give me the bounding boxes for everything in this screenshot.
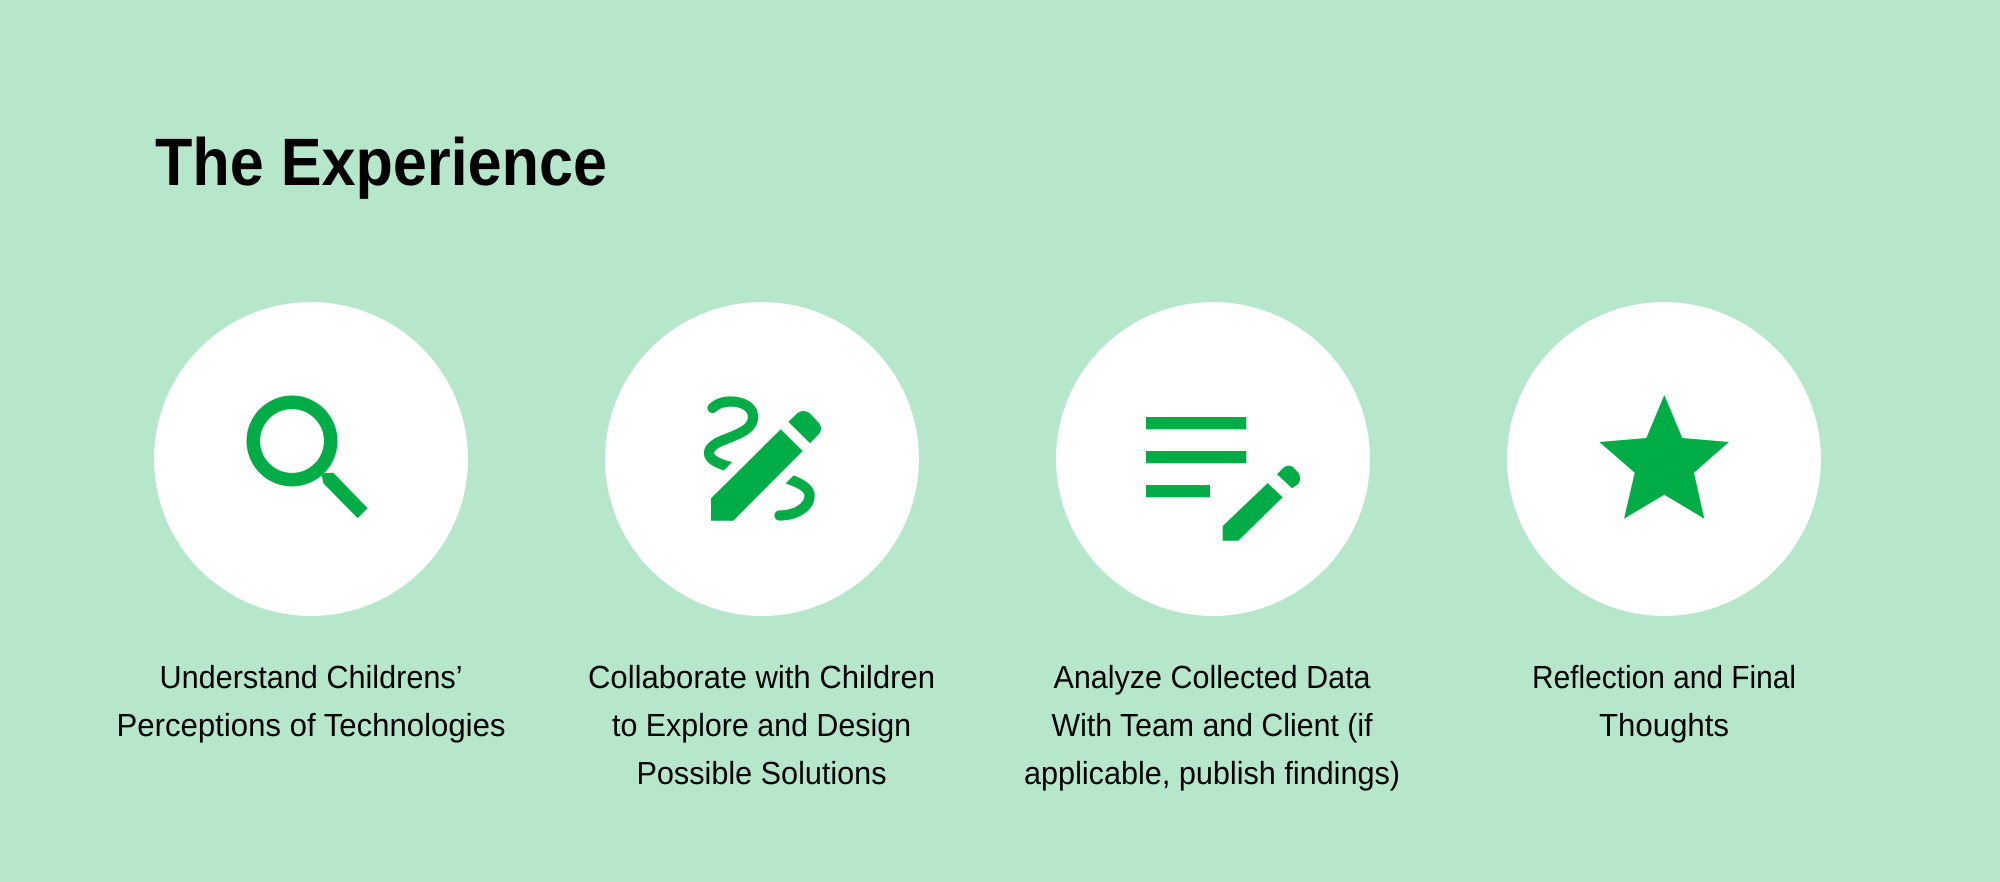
- icon: star: [1599, 395, 1729, 519]
- circle: reflection: [1507, 302, 1821, 616]
- caption: understand: Understand Childrens’: [160, 659, 462, 695]
- caption: analyze: With Team and Client (if: [1052, 707, 1373, 743]
- caption: reflection: Reflection and Final: [1532, 659, 1796, 695]
- caption: collaborate: [588, 659, 935, 791]
- caption: analyze: [1024, 659, 1400, 791]
- icon: text lines with pencil: [1146, 417, 1300, 541]
- circle: understand: [154, 302, 468, 616]
- caption: reflection: [1532, 659, 1796, 743]
- caption: analyze: applicable, publish findings): [1024, 755, 1400, 791]
- panel: understand perceptions: [116, 302, 506, 743]
- caption: understand: Perceptions of Technologies: [116, 707, 506, 743]
- caption: reflection: Thoughts: [1599, 707, 1729, 743]
- panel: analyze: [1024, 302, 1400, 791]
- caption: analyze: Analyze Collected Data: [1054, 659, 1371, 695]
- title: The Experience: [155, 125, 607, 200]
- caption: collaborate: Collaborate with Children: [588, 659, 935, 695]
- circle: collaborate: [605, 302, 919, 616]
- panel: collaborate: [588, 302, 935, 791]
- caption: understand: [116, 659, 506, 743]
- caption: collaborate: to Explore and Design: [612, 707, 911, 743]
- circle: analyze: [1056, 302, 1370, 616]
- caption: collaborate: Possible Solutions: [636, 755, 886, 791]
- panel: reflection: [1507, 302, 1821, 743]
- icon: magnifying glass: [253, 402, 368, 518]
- icon: pencil with squiggle: [707, 402, 821, 521]
